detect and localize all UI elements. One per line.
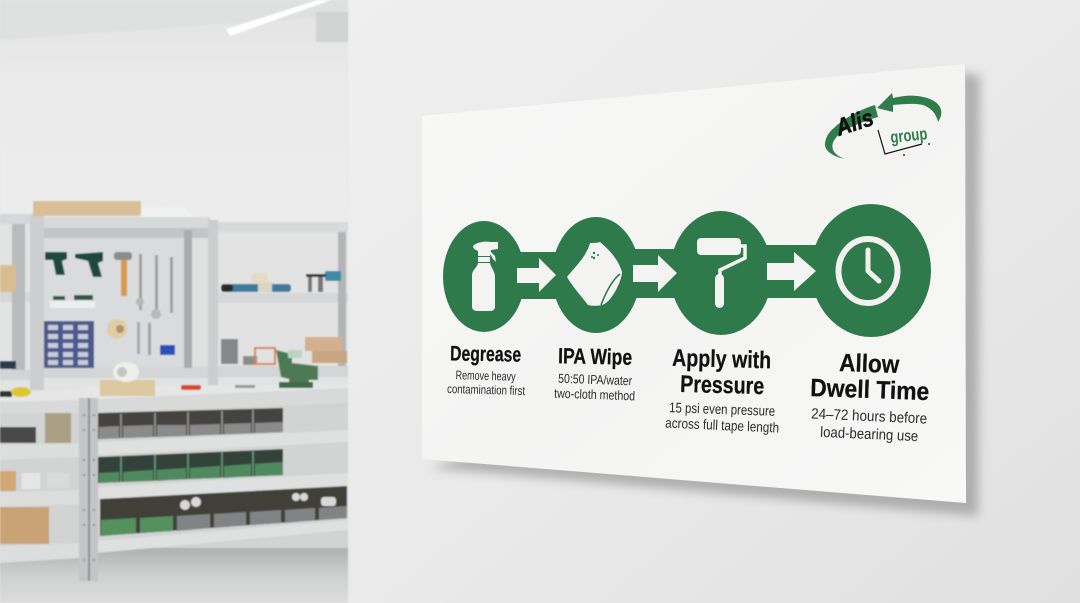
description: Degrease: Remove heavy	[455, 368, 516, 384]
icon: clock	[838, 239, 898, 303]
heading: Apply with Pressure	[672, 345, 772, 400]
description: Apply with Pressure	[665, 399, 780, 435]
background: right wall	[348, 0, 1080, 603]
heading: Allow Dwell Time: Allow	[839, 349, 900, 379]
step 3 text	[665, 345, 780, 435]
step 2 text	[554, 343, 635, 403]
ceiling light	[226, 0, 331, 36]
arrow 1	[517, 258, 556, 292]
panel: sign board	[422, 64, 966, 503]
storage bins	[98, 408, 347, 536]
bench items	[0, 350, 318, 397]
heading: Degrease: Degrease	[450, 342, 521, 367]
icon: spray bottle	[472, 242, 498, 311]
pegboard tools	[44, 252, 175, 368]
arrow 3	[767, 252, 816, 291]
description: Allow Dwell Time: 24–72 hours before	[811, 405, 928, 428]
heading: Allow Dwell Time	[810, 349, 930, 406]
sign shadow	[430, 72, 980, 516]
bench shelves	[0, 388, 348, 563]
description: Allow Dwell Time: load-bearing use	[820, 424, 919, 445]
icon: cloth	[567, 242, 622, 306]
description: Allow Dwell Time	[811, 405, 928, 445]
upright post	[79, 398, 98, 581]
workbench top	[0, 384, 348, 413]
shelf items	[0, 265, 347, 369]
heading: Apply with Pressure: Apply with	[672, 345, 772, 374]
process band: circles and connectors	[443, 204, 931, 337]
description: IPA Wipe	[554, 371, 635, 403]
heading: IPA Wipe: IPA Wipe	[558, 343, 632, 370]
step 1 text	[447, 342, 526, 398]
floor	[0, 548, 348, 603]
arrow 2	[633, 255, 677, 292]
description: Apply with Pressure: 15 psi even pressure	[669, 399, 776, 419]
left shelf contents	[0, 413, 71, 544]
heading: Allow Dwell Time: Dwell Time	[810, 374, 930, 406]
description: Degrease	[447, 368, 526, 398]
step 4 text	[810, 349, 930, 445]
panel: workshop room	[0, 0, 348, 603]
description: IPA Wipe: 50:50 IPA/water	[558, 371, 633, 388]
description: Degrease: contamination first	[447, 382, 526, 398]
description: Apply with Pressure: across full tape length	[665, 415, 780, 435]
lower shelves background	[0, 395, 348, 555]
upper shelving unit	[0, 214, 348, 392]
logo: Alis group: Alis	[832, 104, 877, 142]
description: IPA Wipe: two-cloth method	[554, 386, 635, 403]
logo: Alis group	[825, 93, 941, 159]
logo: Alis group: group	[889, 124, 928, 147]
heading: Apply with Pressure: Pressure	[680, 371, 765, 400]
icon: paint roller	[697, 238, 745, 308]
cardboard tube	[33, 201, 141, 216]
